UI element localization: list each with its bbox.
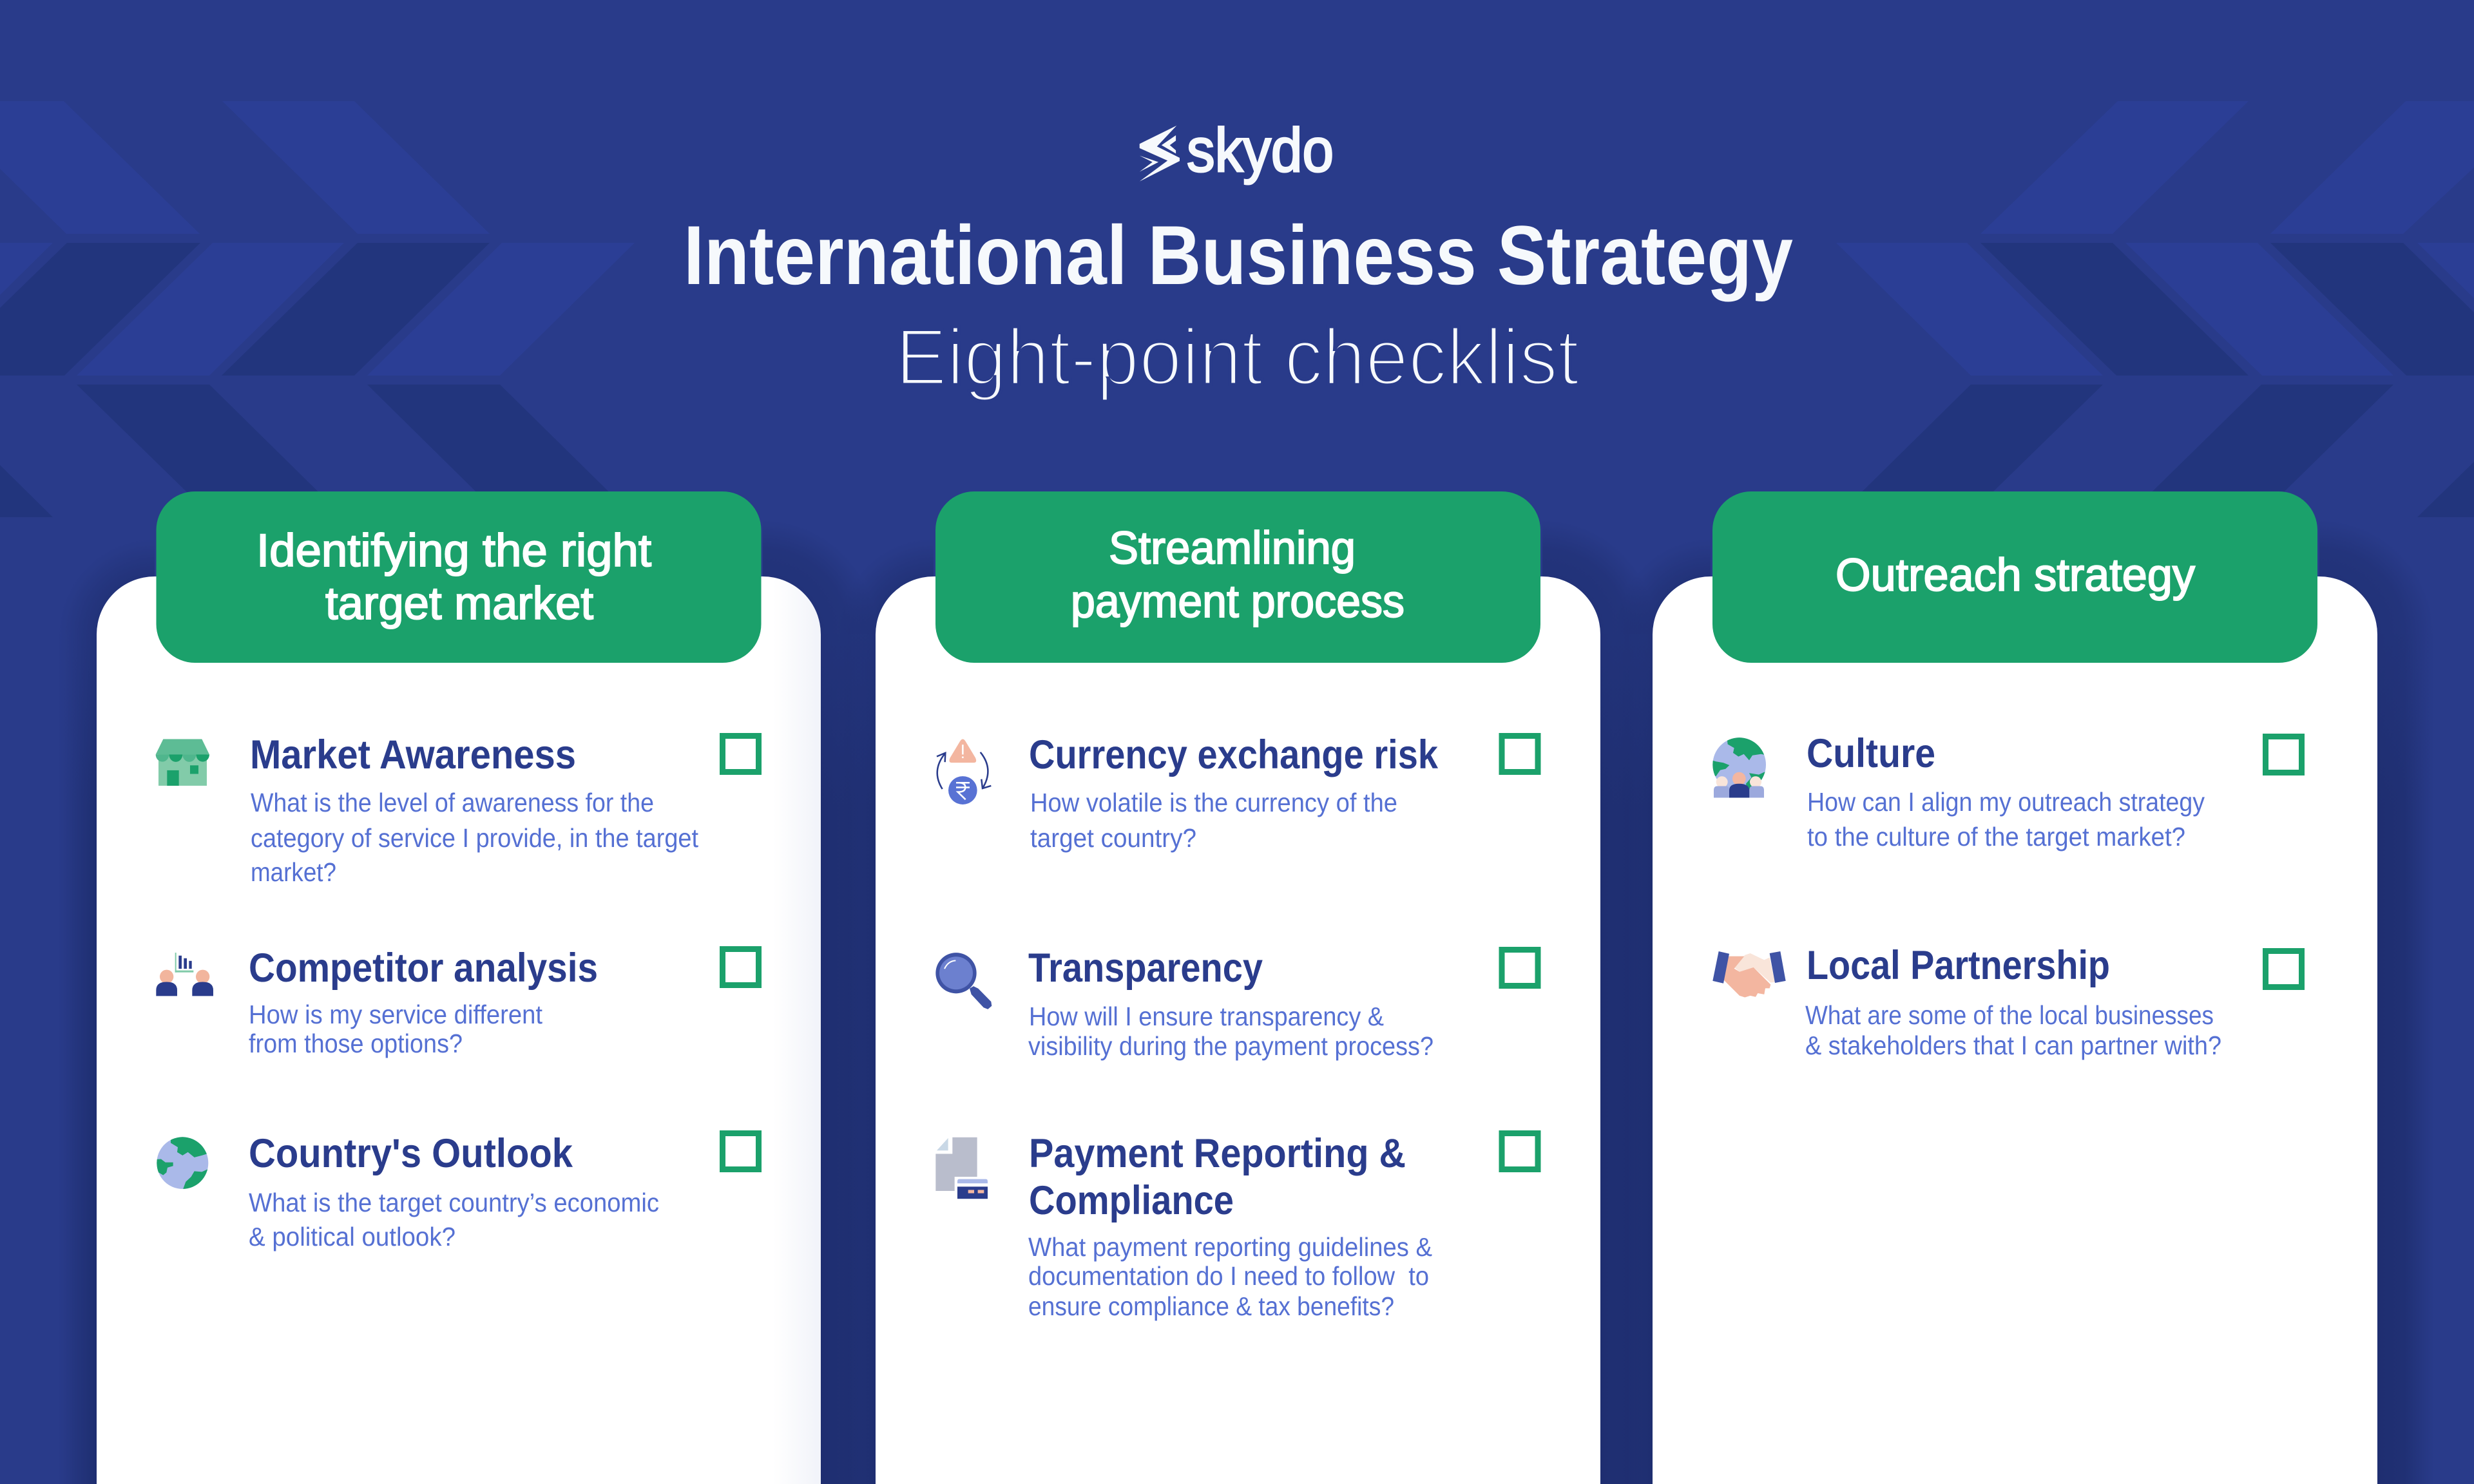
panel: outreach strategy [1653,491,2377,1484]
item: currency exchange risk [1029,732,1439,853]
checkbox [723,1134,759,1170]
icon: store [156,739,209,786]
item: culture: to the culture of the target market? [1807,822,2185,851]
icon: handshake [1712,951,1786,998]
item: competitor analysis: from those options? [249,1029,463,1058]
item: payment reporting and compliance: Compliance [1029,1178,1234,1223]
panel header: Streamlining [1109,523,1356,574]
checkbox [723,949,759,985]
icon: globe with people [1711,736,1767,798]
item: local partnership: Local Partnership [1807,943,2110,988]
item: market awareness: market? [251,857,336,887]
card shadows [0,520,2474,1484]
checkbox [2265,737,2301,773]
panel: identifying the right target market [97,491,821,1484]
item: market awareness: What is the level of awareness for the [251,788,654,817]
item: market awareness: category of service I provide, in the target [251,823,699,853]
item: country's outlook: What is the target country’s economic [249,1188,659,1217]
checkbox [1502,949,1538,985]
icon: globe [157,1137,209,1189]
checkbox [1502,1134,1538,1170]
panel: streamlining payment process [876,491,1600,1484]
item: payment reporting and compliance [1028,1131,1432,1321]
item: currency exchange risk: target country? [1030,823,1196,853]
icon: competitors with chart [156,953,213,996]
item: market awareness [250,732,699,887]
title: International Business Strategy [684,208,1793,302]
checkbox [1502,736,1538,772]
panel header [156,491,762,663]
item: transparency: visibility during the payment process? [1028,1031,1434,1061]
item: currency exchange risk: Currency exchange risk [1029,732,1439,777]
panel header: target market [325,578,593,629]
item: payment reporting and compliance: Payment Reporting & [1029,1131,1406,1176]
item: transparency: Transparency [1028,946,1263,991]
panel header: Outreach strategy [1836,550,2195,601]
subtitle: Eight-point checklist [896,313,1579,402]
item: culture: How can I align my outreach strategy [1807,787,2205,817]
item: culture [1807,731,2205,851]
item: country's outlook: Country's Outlook [249,1131,573,1176]
item: culture: Culture [1807,731,1935,776]
panel header: Identifying the right [256,526,651,576]
logo [1140,116,1334,185]
item: local partnership [1805,943,2221,1060]
item: currency exchange risk: How volatile is the currency of the [1030,788,1397,817]
item: payment reporting and compliance: documentation do I need to follow to [1028,1261,1429,1291]
background chevron pattern: right [1836,101,2474,517]
panel header [1712,491,2317,663]
card [1653,576,2377,1484]
panel header: payment process [1071,576,1405,627]
icon: document and card [935,1137,988,1199]
item: country's outlook [249,1131,659,1251]
item: competitor analysis [249,946,598,1058]
card [876,576,1600,1484]
checkbox [2265,951,2301,987]
item: competitor analysis: How is my service different [249,1000,543,1029]
icon: currency risk [937,739,991,804]
item: payment reporting and compliance: ensure compliance & tax benefits? [1028,1291,1394,1321]
icon: magnifying glass [935,953,992,1009]
panel header [935,491,1540,663]
item: competitor analysis: Competitor analysis [249,946,598,991]
item: transparency [1028,946,1434,1061]
logo mark [1140,126,1180,182]
item: country's outlook: & political outlook? [249,1222,455,1251]
item: local partnership: & stakeholders that I can partner with? [1805,1031,2221,1060]
logo wordmark: skydo [1187,116,1334,185]
item: payment reporting and compliance: What payment reporting guidelines & [1028,1232,1432,1262]
item: local partnership: What are some of the local businesses [1805,1000,2214,1030]
background chevron pattern: left [0,101,635,517]
checkbox [723,736,759,772]
card [97,576,821,1484]
item: market awareness: Market Awareness [250,732,576,777]
item: transparency: How will I ensure transparency & [1029,1002,1384,1031]
